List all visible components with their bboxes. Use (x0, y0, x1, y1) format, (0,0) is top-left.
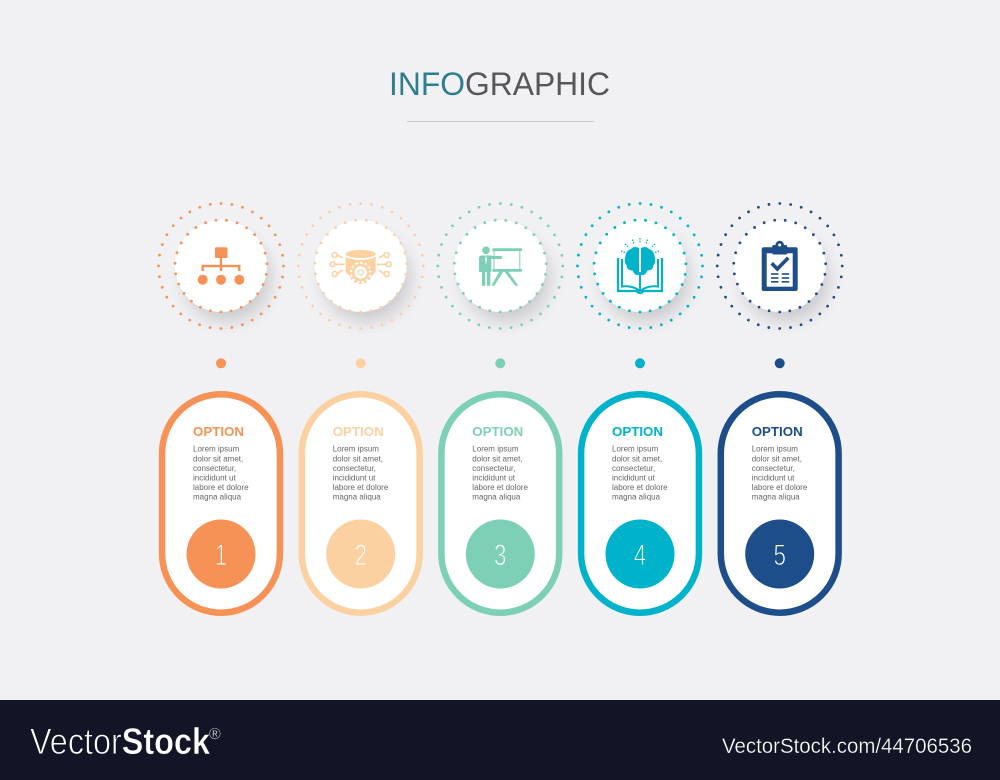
option card 2: consectetur, (333, 464, 376, 473)
icon: database with gear (330, 250, 391, 283)
option card 3: magna aliqua (472, 493, 521, 502)
option card 2: magna aliqua (333, 493, 381, 502)
footer logo: ® (209, 726, 221, 743)
option card 2 (302, 394, 420, 613)
option card 1: incididunt ut (193, 474, 236, 482)
icon: clipboard checklist (762, 241, 798, 291)
option card 2: OPTION (333, 424, 384, 439)
option card 4: 4 (634, 538, 646, 572)
option card 5: consectetur, (752, 464, 795, 473)
option card 2: Lorem ipsum (333, 445, 379, 454)
option card 4: labore et dolore (612, 483, 668, 492)
option card 5: incididunt ut (752, 474, 795, 482)
option card 1 (162, 394, 280, 613)
icon: presenter at board (479, 246, 522, 286)
option card 3: Lorem ipsum (472, 445, 519, 454)
column 1 (158, 204, 284, 613)
icon ring 2 (298, 204, 423, 328)
footer logo: VectorStock (30, 721, 210, 762)
footer id: VectorStock.com/44706536 (722, 735, 972, 758)
option card 4: dolor sit amet, (612, 454, 662, 463)
option card 4 (581, 394, 699, 613)
option card 3 (441, 394, 559, 613)
icon ring 3 (438, 204, 563, 328)
option card 4: incididunt ut (612, 474, 655, 482)
option card 1: Lorem ipsum (193, 445, 240, 454)
option card 5: OPTION (752, 424, 803, 439)
option card 1: magna aliqua (193, 493, 242, 502)
option card 5: labore et dolore (752, 483, 808, 492)
option card 5 (721, 394, 839, 613)
option card 3: incididunt ut (472, 474, 516, 482)
option card 1: consectetur, (193, 464, 236, 473)
icon: brain on open book (618, 238, 662, 294)
icon ring 4 (578, 204, 702, 328)
option card 5: Lorem ipsum (752, 445, 798, 454)
option card 1: labore et dolore (193, 483, 249, 492)
option card 4: magna aliqua (612, 493, 661, 502)
icon ring 5 (717, 204, 842, 328)
option card 2: dolor sit amet, (333, 454, 383, 463)
option card 5: magna aliqua (752, 493, 800, 502)
connector dot (495, 358, 505, 368)
connector dot (635, 358, 645, 368)
option card 2: incididunt ut (333, 474, 376, 482)
option card 5: dolor sit amet, (752, 454, 802, 463)
option card 1: dolor sit amet, (193, 454, 243, 463)
column 4 (578, 204, 702, 613)
option card 3: dolor sit amet, (472, 454, 523, 463)
option card 4: Lorem ipsum (612, 445, 659, 454)
column 2 (298, 204, 423, 613)
title: INFOGRAPHIC (389, 66, 610, 102)
option card 2: 2 (354, 538, 367, 572)
option card 3: consectetur, (472, 464, 515, 473)
option card 1: OPTION (193, 424, 244, 439)
option card 1: 1 (215, 538, 227, 572)
option card 2: labore et dolore (333, 483, 389, 492)
icon: hierarchy (198, 247, 244, 285)
icon ring 1 (158, 204, 284, 328)
option card 4: consectetur, (612, 464, 655, 473)
option card 3: OPTION (472, 424, 523, 439)
option card 4: OPTION (612, 424, 663, 439)
connector dot (216, 358, 226, 368)
footer bar (0, 700, 1000, 780)
column 3 (438, 204, 563, 613)
option card 3: labore et dolore (472, 483, 528, 492)
connector dot (356, 358, 366, 368)
option card 5: 5 (773, 538, 786, 572)
column 5 (717, 204, 842, 613)
option card 3: 3 (494, 538, 507, 572)
connector dot (775, 358, 785, 368)
